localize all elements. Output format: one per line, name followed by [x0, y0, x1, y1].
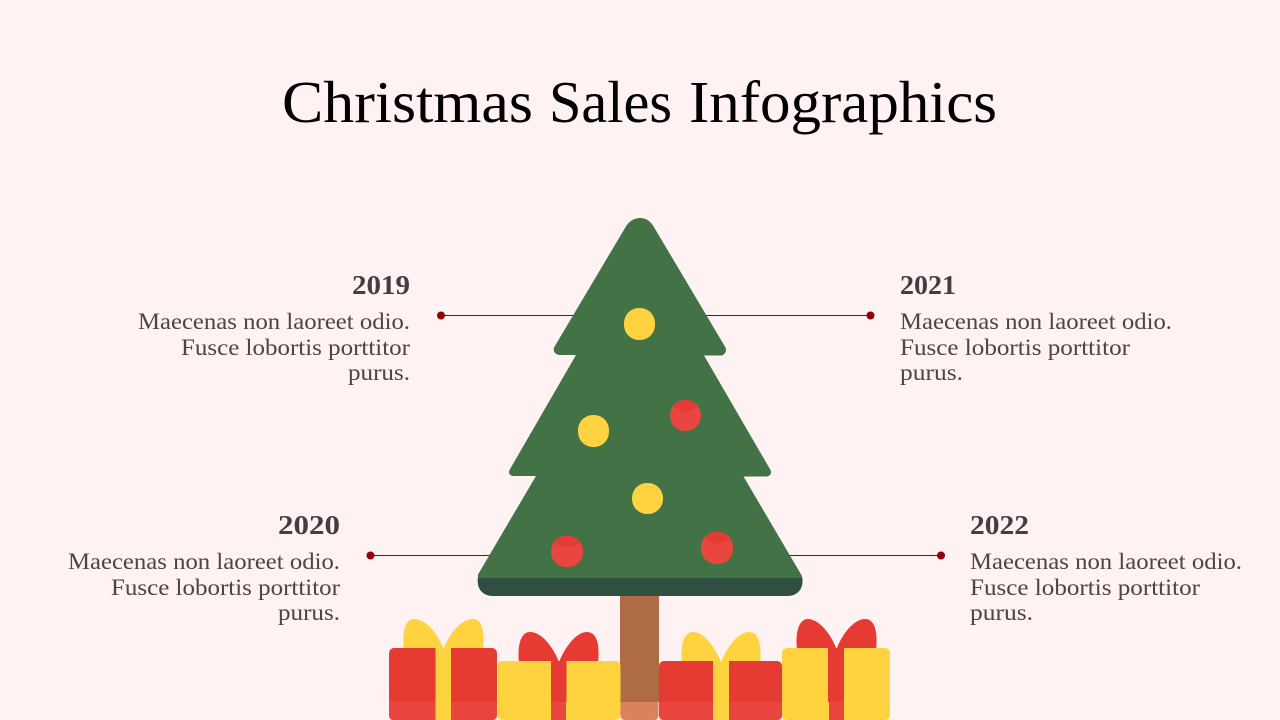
gift 2: yellow with red ribbon: [498, 632, 620, 720]
gift 3: red with yellow ribbon: [659, 632, 782, 720]
text block: 2021: 2021: [900, 270, 956, 300]
text block: 2019: Maecenas non laoreet odio.: [138, 309, 410, 334]
text block: 2021: [900, 270, 1172, 385]
text block: 2022: Maecenas non laoreet odio.: [970, 549, 1242, 574]
tree base shadow: [478, 578, 802, 596]
text block: 2020: purus.: [278, 600, 340, 625]
text block: 2022: Fusce lobortis porttitor: [970, 575, 1200, 600]
title: Sales: [549, 69, 672, 135]
ornament: yellow left: [578, 415, 609, 447]
title: Christmas: [282, 69, 533, 135]
text block: 2021: Fusce lobortis porttitor: [900, 335, 1130, 360]
christmas tree: [478, 218, 802, 596]
text block: 2019: [138, 270, 410, 385]
text block: 2019: 2019: [352, 270, 410, 300]
connector: 2022: [785, 552, 945, 560]
gift 4: yellow with red ribbon: [782, 619, 890, 720]
text block: 2022: 2022: [970, 510, 1029, 540]
ornament: red lower right: [701, 532, 733, 564]
text block: 2020: Fusce lobortis porttitor: [111, 575, 340, 600]
gift 1: red with yellow ribbon: [389, 619, 497, 720]
text block: 2021: purus.: [900, 360, 963, 385]
connector: 2019: [437, 312, 580, 320]
title: Infographics: [689, 69, 997, 135]
text block: 2020: 2020: [278, 510, 340, 540]
ornament: red lower left: [551, 536, 583, 567]
tree foliage: [478, 218, 802, 578]
connector: 2021: [700, 312, 874, 320]
text block: 2021: Maecenas non laoreet odio.: [900, 309, 1172, 334]
text block: 2020: Maecenas non laoreet odio.: [68, 549, 340, 574]
text block: 2022: [970, 510, 1242, 625]
ornament: red upper right: [670, 400, 701, 431]
connector: 2020: [366, 552, 495, 560]
text block: 2019: Fusce lobortis porttitor: [181, 335, 410, 360]
text block: 2022: purus.: [970, 600, 1033, 625]
tree trunk: [620, 590, 659, 720]
text block: 2019: purus.: [348, 360, 410, 385]
ornament: yellow top: [624, 308, 655, 340]
ornament: yellow center: [632, 483, 663, 514]
title: [282, 69, 997, 135]
text block: 2020: [68, 510, 340, 625]
